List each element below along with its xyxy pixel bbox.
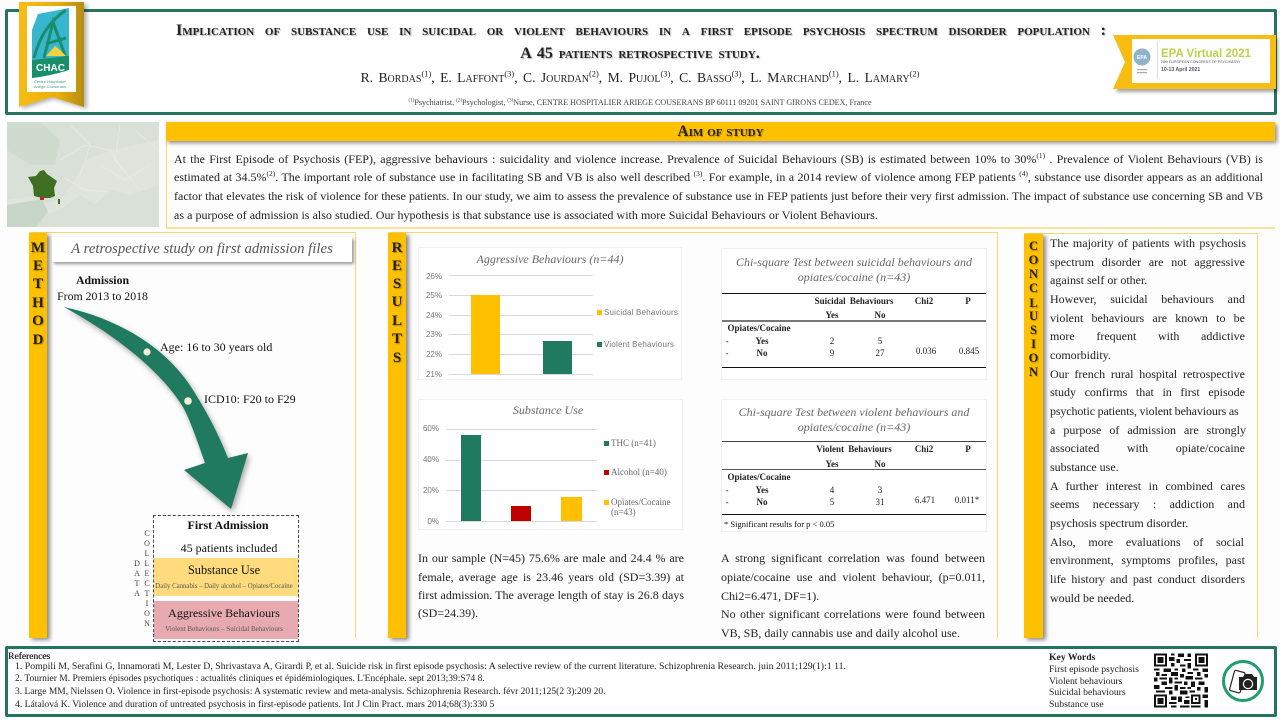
table: suicidal behaviours chi-square: 9: [830, 348, 834, 358]
results side bar: L: [392, 313, 402, 329]
sample description text: In our sample (N=45) 75.6% are male and 24.4 % are: [418, 551, 684, 565]
table: violent behaviours chi-square: Yes: [756, 485, 768, 495]
conclusion side bar: C: [1029, 239, 1038, 253]
arrow: patient pathway: [64, 307, 252, 514]
table: suicidal behaviours chi-square: 0.845: [959, 346, 979, 356]
table: violent behaviours chi-square: 5: [830, 497, 834, 507]
chart legend: [604, 438, 670, 517]
table: violent behaviours chi-square: No: [874, 459, 886, 469]
chart title: Aggressive Behaviours (n=44): [477, 252, 623, 266]
conclusion text: spectrum disorder are not aggressive: [1050, 255, 1245, 269]
conclusion text: associated with opiate/cocaine: [1050, 441, 1245, 455]
data collection vertical label: A: [134, 569, 140, 578]
method heading: [52, 237, 352, 262]
method side bar: D: [33, 332, 43, 348]
table: suicidal behaviours chi-square: Chi2: [915, 296, 933, 306]
data collection vertical label: T: [135, 579, 140, 588]
table: suicidal behaviours chi-square: Yes: [826, 310, 838, 320]
first admission title: First Admission: [187, 518, 269, 532]
logo ribbon: CHAC: CHAC: [36, 63, 65, 74]
correlation text: No other significant correlations were found between: [721, 607, 985, 621]
conclusion side bar: I: [1031, 337, 1036, 351]
conference ribbon: EPA Virtual 2021: EPA: [1137, 55, 1147, 61]
conclusion side bar: S: [1030, 323, 1037, 337]
table title: opiates/cocaine (n=43): [798, 270, 910, 284]
references: 1. Pompili M, Serafini G, Innamorati M, Lester D, Shrivastava A, Girardi P, et al. Suicide risk in first episode psychosis: A selective review of the current literature. Schizophrenia Research. juin 2011;129(1):1 11.: [15, 661, 846, 672]
conclusion text: would be needed.: [1050, 591, 1134, 605]
table: violent behaviours chi-square: 31: [876, 497, 884, 507]
icon: phone and camera: [1222, 660, 1264, 702]
table: violent behaviours chi-square: 3: [878, 485, 882, 495]
substance use band: Substance Use: [188, 563, 260, 577]
chart title: Substance Use: [513, 403, 583, 417]
panel: aim of study: [166, 122, 1275, 229]
sample description text: [418, 551, 684, 620]
table: suicidal behaviours chi-square: 5: [878, 336, 882, 346]
admission label: [57, 273, 148, 303]
conclusion text: psychosis spectrum disorder.: [1050, 516, 1188, 530]
table: suicidal behaviours chi-square: -: [726, 336, 728, 346]
data collection vertical label: O: [144, 539, 150, 548]
QR code: [1154, 654, 1208, 708]
heading: aim of study: Aim of study: [677, 123, 764, 140]
bar chart: aggressive behaviours: 25%: [426, 291, 442, 300]
title: A 45 patients retrospective study.: [520, 45, 760, 62]
results side bar: [388, 233, 406, 638]
conclusion text: Also, more evaluations of social: [1050, 535, 1244, 549]
table: violent behaviours chi-square: P: [965, 444, 971, 454]
key words: Substance use: [1049, 699, 1104, 710]
data collection vertical label: D: [134, 559, 140, 568]
conclusion text: study confirms that in first episode: [1050, 385, 1245, 399]
conclusion text: The majority of patients with psychosis: [1050, 236, 1246, 250]
data collection vertical label: T: [145, 589, 150, 598]
bar chart: substance use: 60%: [423, 424, 439, 433]
first admission box: [153, 515, 299, 642]
method side bar: E: [33, 258, 43, 274]
conference ribbon: EPA Virtual 2021: EPA Virtual 2021: [1161, 48, 1252, 60]
conclusion side bar: O: [1029, 253, 1038, 267]
conclusion text: substance use.: [1050, 460, 1119, 474]
method side bar: O: [32, 313, 44, 329]
table: suicidal behaviours chi-square: P: [965, 296, 971, 306]
heading: aim of study: [166, 122, 1275, 141]
method side bar: H: [32, 295, 44, 311]
data collection vertical label: L: [145, 549, 150, 558]
table: suicidal behaviours chi-square: 2: [830, 336, 834, 346]
conclusion text: a purpose of admission are strongly: [1050, 423, 1246, 437]
data collection vertical label: C: [144, 579, 150, 588]
conclusion text: However, suicidal behaviours and: [1050, 292, 1245, 306]
results side bar: S: [393, 350, 401, 366]
conclusion text: life history and past conduct disorders: [1050, 572, 1245, 586]
table: violent behaviours chi-square: -: [726, 485, 728, 495]
affiliations: (1)Psychiatrist, (2)Psychologist, (3)Nurse, CENTRE HOSPITALIER ARIEGE COUSERANS BP 60111 09201 SAINT GIRONS CEDEX, France: [408, 98, 872, 107]
method side bar: M: [31, 240, 45, 256]
substance use band: [154, 558, 298, 596]
header panel: [5, 9, 1277, 115]
panel: method: [29, 232, 356, 638]
key words: Key Words: [1049, 652, 1095, 663]
table: suicidal behaviours chi-square: 0.036: [916, 346, 936, 356]
key words: First episode psychosis: [1049, 664, 1139, 675]
references: References: [8, 652, 50, 662]
aim text: At the First Episode of Psychosis (FEP), aggressive behaviours : suicidality and violence increase. Prevalence of Suicidal Behaviours (SB) is estimated between 10% to 30%(1) . Prevalence of Violent Behaviours (VB) is: [174, 151, 1263, 166]
data collection vertical label: N: [144, 619, 150, 628]
conclusion text: A further interest in combined cares: [1050, 479, 1245, 493]
bar chart: aggressive behaviours: 23%: [426, 330, 442, 339]
aim text: as a purpose of admission is also studied. Our hypothesis is that substance use is associated with more Suicidal Behaviours or Violent Behaviours.: [174, 208, 878, 222]
bar chart: substance use: [418, 399, 683, 530]
key words: Suicidal behaviours: [1049, 687, 1126, 698]
conclusion text: comorbidity.: [1050, 348, 1111, 362]
table title: opiates/cocaine (n=43): [798, 420, 910, 434]
table: suicidal behaviours chi-square: No: [756, 348, 768, 358]
bar chart: aggressive behaviours: 21%: [426, 370, 442, 379]
conclusion side bar: L: [1029, 296, 1038, 310]
aggressive behaviours band: Violent Behaviours – Suicidal Behaviours: [165, 625, 283, 633]
references: [8, 652, 846, 710]
sample description text: female, average age is 23.46 years old (SD=3.39) at: [418, 570, 684, 584]
table: violent behaviours chi-square: Chi2: [915, 444, 933, 454]
method side bar: T: [33, 276, 43, 292]
conference ribbon: EPA Virtual 2021: 10-13 April 2021: [1161, 67, 1200, 73]
table: suicidal behaviours chi-square: No: [874, 310, 886, 320]
method side bar: [29, 233, 47, 638]
data collection vertical label: E: [145, 569, 150, 578]
conclusion text: psychotic patients, violent behaviours as: [1050, 404, 1239, 418]
sample description text: (SD=24.39).: [418, 606, 478, 620]
bar chart: aggressive behaviours: 22%: [426, 350, 442, 359]
title: [176, 22, 1106, 62]
panel: references and key words: [5, 646, 1277, 717]
chart legend: (n=43): [611, 507, 636, 517]
admission label: From 2013 to 2018: [57, 289, 148, 303]
method heading: A retrospective study on first admission files: [71, 241, 333, 257]
correlation text: Chi2=6.471, DF=1).: [721, 589, 819, 603]
correlation text: VB, SB, daily cannabis use and daily alcohol use.: [721, 626, 960, 640]
conference ribbon: EPA Virtual 2021: [1113, 35, 1280, 94]
key words: Violent behaviours: [1049, 676, 1122, 687]
references: 3. Large MM, Nielssen O. Violence in first-episode psychosis: A systematic review and meta-analysis. Schizophrenia Research. févr 2011;125(2 3):209 20.: [15, 687, 606, 697]
conclusion side bar: C: [1029, 281, 1038, 295]
table: suicidal behaviours chi-square: Suicidal Behaviours: [815, 296, 893, 306]
map: France in Europe: [7, 122, 159, 227]
diagnosis criterion: ICD10: F20 to F29: [204, 392, 296, 406]
table: violent behaviours chi-square: Violent Behaviours: [816, 444, 892, 454]
table: violent behaviours chi-square: -: [726, 497, 728, 507]
correlation text: A strong significant correlation was found between: [721, 551, 985, 565]
results side bar: R: [392, 240, 402, 256]
data collection vertical label: A: [134, 589, 140, 598]
table: suicidal behaviours chi-square: [721, 248, 987, 380]
conference ribbon: EPA Virtual 2021: 28th EUROPEAN CONGRESS OF PSYCHIATRY: [1161, 60, 1241, 64]
table: violent behaviours chi-square: 6.471: [915, 495, 935, 505]
conclusion side bar: [1024, 234, 1043, 638]
table: suicidal behaviours chi-square: Yes: [756, 336, 768, 346]
bar chart: substance use: 40%: [423, 455, 439, 464]
aim text: [174, 151, 1263, 222]
table: violent behaviours chi-square: 4: [830, 485, 834, 495]
table: violent behaviours chi-square: Yes: [826, 459, 838, 469]
substance use band: Daily Cannabis – Daily alcohol – Opiates/Cocaine: [155, 583, 293, 590]
title: Implication of substance use in suicidal or violent behaviours in a first episode psychosis spectrum disorder population :: [176, 22, 1106, 39]
correlation text: opiate/cocaine use and violent behaviour, (p=0.011,: [721, 570, 985, 584]
admission label: Admission: [76, 273, 129, 287]
results side bar: E: [392, 258, 402, 274]
correlation text: [721, 551, 985, 640]
chart legend: [597, 308, 678, 349]
table title: Chi-square Test between violent behaviours and: [739, 405, 969, 419]
age criterion: Age: 16 to 30 years old: [160, 340, 272, 354]
logo ribbon: CHAC: Ariège-Couserans: [34, 84, 66, 89]
aim text: estimated at 34.5%(2). The important role of substance use in facilitating SB and VB is also well described (3). For example, in a 2014 review of violence among FEP patients (4), substance use disorder appears as an additional: [174, 169, 1263, 184]
data collection vertical label: [134, 529, 150, 628]
conclusion side bar: O: [1029, 351, 1038, 365]
table title: [736, 255, 972, 284]
aggressive behaviours band: Aggressive Behaviours: [168, 606, 280, 620]
table: violent behaviours chi-square: * Significant results for p < 0.05: [724, 519, 834, 529]
data collection vertical label: C: [144, 529, 150, 538]
table: violent behaviours chi-square: [721, 399, 987, 532]
conclusion text: environment, symptoms profiles, past: [1050, 553, 1245, 567]
chart legend: THC (n=41): [611, 438, 656, 448]
table: violent behaviours chi-square: Opiates/Cocaine: [728, 472, 790, 482]
patients included: 45 patients included: [181, 541, 277, 555]
key words: [1049, 652, 1139, 710]
conclusion side bar: U: [1029, 309, 1038, 323]
table: suicidal behaviours chi-square: 27: [876, 348, 884, 358]
references: 4. Látalová K. Violence and duration of untreated psychosis in first-episode patients. Int J Clin Pract. mars 2014;68(3):330 5: [15, 699, 494, 710]
chart legend: Violent Behaviours: [604, 340, 674, 349]
conclusion text: [1050, 236, 1246, 605]
conclusion text: Our french rural hospital retrospective: [1050, 367, 1245, 381]
bar chart: aggressive behaviours: [418, 247, 682, 380]
conclusion text: violent behaviours are known to be: [1050, 311, 1245, 325]
results side bar: T: [392, 331, 402, 347]
bar chart: substance use: 0%: [427, 517, 439, 526]
conclusion text: against self or other.: [1050, 273, 1147, 287]
data collection vertical label: L: [145, 559, 150, 568]
aggressive behaviours band: [154, 601, 298, 639]
authors: R. Bordas(1), E. Laffont(3), C. Jourdan(2), M. Pujol(3), C. Basso(3), L. Marchand(1), L. Lamary(2): [361, 68, 919, 85]
chart legend: Suicidal Behaviours: [604, 308, 678, 317]
chart legend: Opiates/Cocaine: [611, 497, 670, 507]
results side bar: S: [393, 276, 401, 292]
data collection vertical label: I: [146, 599, 149, 608]
chart legend: Alcohol (n=40): [611, 467, 667, 477]
results side bar: U: [392, 294, 402, 310]
table: violent behaviours chi-square: No: [756, 497, 768, 507]
panel: conclusion: [1024, 233, 1258, 638]
references: 2. Tournier M. Premiers épisodes psychotiques : actualités cliniques et épidémiologiques. L'Encéphale. sept 2013;39:S74 8.: [15, 674, 485, 684]
table: suicidal behaviours chi-square: Opiates/Cocaine: [728, 323, 790, 333]
aim text: factor that elevates the risk of violence for these patients. In our study, we aim to assess the prevalence of substance use in FEP patients just before their very first admission. The impact of substance use concerning SB and VB: [174, 189, 1263, 203]
table: suicidal behaviours chi-square: -: [726, 348, 728, 358]
logo ribbon: CHAC: Centre Hospitalier: [34, 79, 67, 84]
conclusion text: more frequent with addictive: [1050, 329, 1245, 343]
data collection vertical label: O: [144, 609, 150, 618]
table title: [739, 405, 970, 434]
conclusion text: seems necessary : addiction and: [1050, 497, 1245, 511]
logo ribbon: CHAC: [19, 2, 90, 110]
sample description text: first admission. The average length of stay is 26.8 days: [418, 588, 684, 602]
conclusion side bar: N: [1029, 365, 1038, 379]
bar chart: aggressive behaviours: 26%: [426, 272, 442, 281]
table title: Chi-square Test between suicidal behaviours and: [736, 255, 972, 269]
panel: results: [388, 232, 998, 638]
conclusion side bar: N: [1029, 267, 1038, 281]
table: violent behaviours chi-square: 0.011*: [955, 495, 979, 505]
bar chart: aggressive behaviours: 24%: [426, 311, 442, 320]
bar chart: substance use: 20%: [423, 486, 439, 495]
